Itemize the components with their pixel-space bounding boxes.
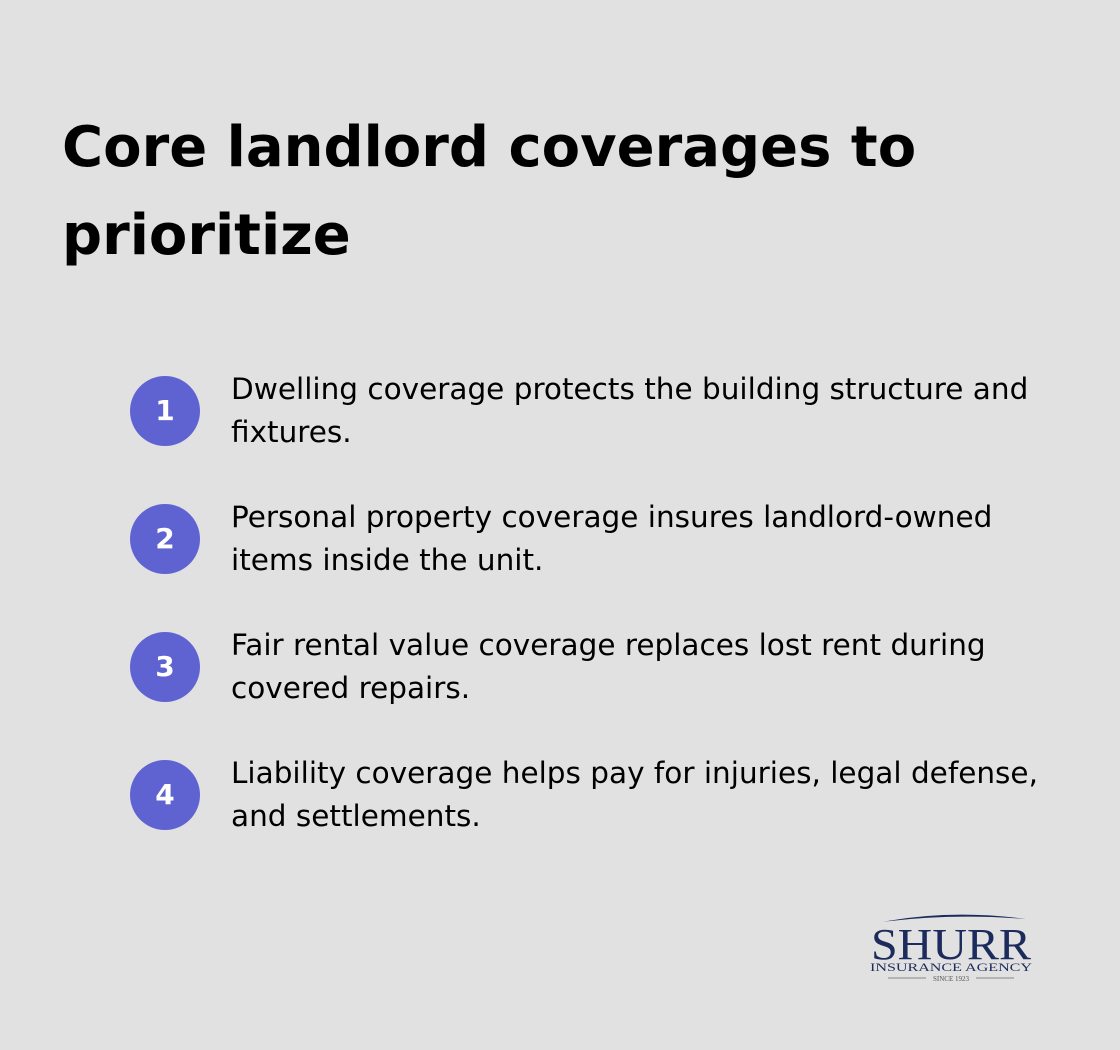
- item 4: [130, 756, 1038, 833]
- title: Core landlord coverages to: [62, 115, 916, 180]
- text 3: Fair rental value coverage replaces lost rent during: [231, 628, 986, 662]
- title: [62, 115, 916, 268]
- text 4: Liability coverage helps pay for injuries, legal defense,: [231, 756, 1038, 790]
- title: prioritize: [62, 203, 351, 268]
- badge 2: 2: [155, 522, 175, 555]
- item 1: [130, 372, 1028, 449]
- text 3: covered repairs.: [231, 671, 470, 705]
- logo: INSURANCE AGENCY: [870, 960, 1032, 974]
- logo: SHURR: [871, 920, 1032, 969]
- badge 2: [130, 504, 200, 574]
- text 2: Personal property coverage insures landlord-owned: [231, 500, 992, 534]
- text 1: Dwelling coverage protects the building structure and: [231, 372, 1028, 406]
- text 3: [231, 628, 986, 705]
- item 2: [130, 500, 992, 577]
- badge 1: 1: [155, 394, 175, 427]
- badge 3: [130, 632, 200, 702]
- text 4: [231, 756, 1038, 833]
- badge 4: [130, 760, 200, 830]
- item 3: [130, 628, 986, 705]
- text 2: [231, 500, 992, 577]
- text 2: items inside the unit.: [231, 543, 543, 577]
- badge 1: [130, 376, 200, 446]
- text 1: fixtures.: [231, 415, 352, 449]
- text 4: and settlements.: [231, 799, 481, 833]
- logo: [870, 914, 1032, 982]
- badge 4: 4: [155, 778, 175, 811]
- badge 3: 3: [155, 650, 175, 683]
- text 1: [231, 372, 1028, 449]
